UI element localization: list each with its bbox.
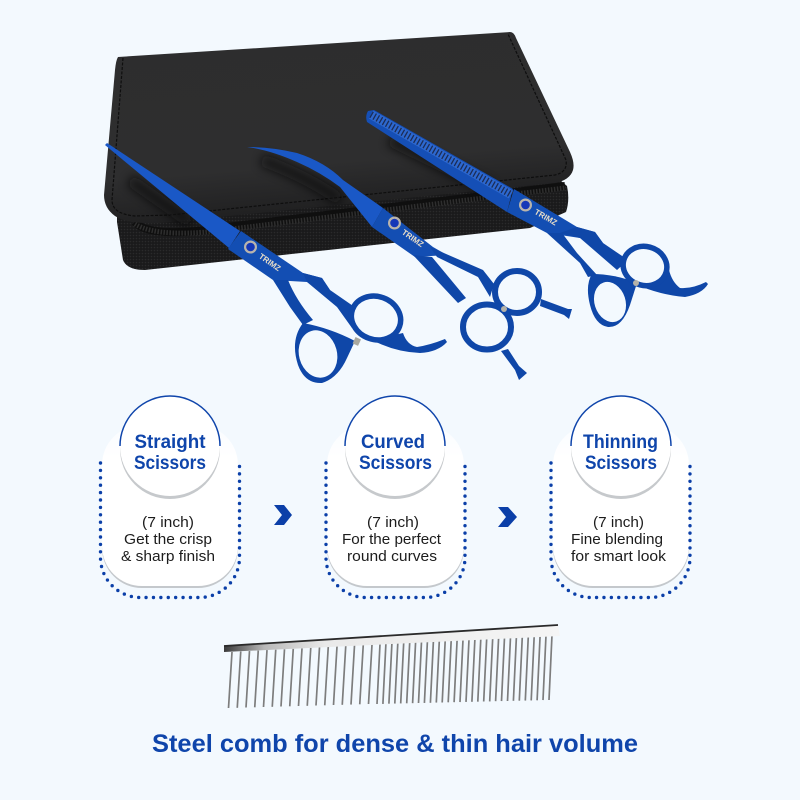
text block (121, 515, 215, 565)
thinning scissors (366, 110, 708, 327)
text block: Get the crisp (124, 532, 212, 548)
heading (583, 431, 658, 474)
panel: curved scissors (326, 396, 465, 598)
dotted outline (100, 463, 240, 598)
comb spine (224, 625, 560, 652)
arrow (498, 507, 517, 527)
icon: thinning blade (366, 110, 513, 212)
heading: Curved (361, 431, 425, 453)
heading: Scissors (585, 452, 657, 474)
caption: Steel comb for dense & thin hair volume (152, 730, 638, 758)
dotted outline (551, 463, 690, 598)
heading: Scissors (359, 452, 432, 474)
icon: pivot plate (372, 208, 447, 257)
icon: pivot gem (244, 240, 257, 254)
icon: blade teeth (371, 114, 511, 194)
icon: finger shanks and loops (547, 227, 708, 327)
heading: Thinning (583, 431, 658, 453)
heading (134, 431, 206, 474)
text block: For the perfect (342, 532, 441, 548)
text block: Fine blending (571, 532, 663, 548)
heading: Scissors (134, 452, 206, 474)
text block: & sharp finish (121, 549, 215, 565)
card (327, 427, 464, 588)
badge circle (120, 396, 220, 499)
text block (571, 515, 667, 565)
brand mark: TRIMZ (257, 252, 282, 273)
text block: (7 inch) (367, 515, 419, 531)
badge circle (571, 396, 671, 499)
dotted outline (326, 463, 465, 598)
comb teeth (228, 635, 552, 708)
straight scissors (105, 143, 447, 383)
heading: Straight (134, 431, 206, 453)
text block: round curves (347, 549, 437, 565)
panel: straight scissors (100, 396, 240, 598)
text block (342, 515, 441, 565)
text block: for smart look (571, 549, 667, 565)
icon: pivot plate (228, 231, 330, 290)
steel comb (224, 625, 560, 708)
card (553, 427, 689, 588)
text block: (7 inch) (593, 515, 644, 531)
icon: pivot gem (519, 198, 532, 212)
curved scissors (247, 147, 572, 380)
icon: curved blade (247, 147, 383, 227)
blade shadows on case (130, 140, 490, 222)
icon: pivot plate (507, 189, 603, 243)
brand mark: TRIMZ (533, 207, 559, 227)
text block: (7 inch) (142, 515, 194, 531)
card (102, 427, 238, 588)
panel: thinning scissors (551, 396, 690, 598)
arrow (274, 505, 292, 525)
icon: finger shanks and loops (413, 247, 572, 380)
black zip case (104, 32, 574, 270)
badge circle (345, 396, 445, 499)
icon: pivot gem (388, 216, 401, 230)
heading (359, 431, 432, 474)
icon: finger shanks and loops (273, 273, 447, 383)
icon: straight blade (105, 143, 240, 248)
brand mark: TRIMZ (400, 228, 425, 249)
